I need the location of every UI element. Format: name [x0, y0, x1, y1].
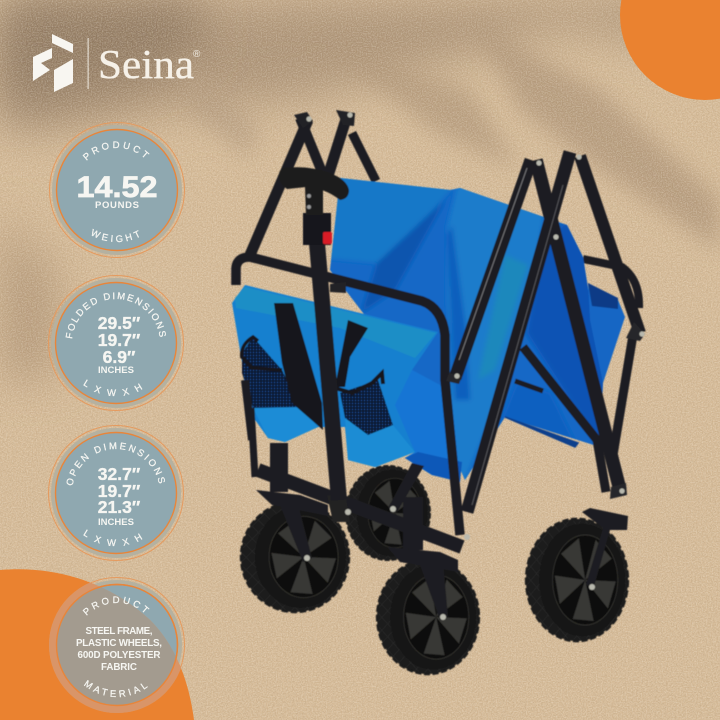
logo: Seina	[33, 34, 201, 92]
badge: open dimensions: 32.7″	[98, 464, 141, 484]
right pocket	[588, 283, 625, 383]
right dark panel	[525, 222, 604, 435]
badge: folded dimensions: INCHES	[98, 365, 134, 376]
badge: product material: FABRIC	[101, 662, 137, 673]
right pocket bottom	[345, 418, 415, 467]
badge: product material: MATERIAL	[84, 680, 148, 698]
left flap	[325, 170, 455, 263]
back frame tubes	[250, 110, 639, 455]
fabric body	[325, 170, 625, 485]
wordmark: Seina	[98, 41, 194, 87]
bottom frame and posts	[245, 380, 462, 550]
left pocket bottom	[253, 407, 318, 442]
badge: open dimensions: OPEN DIMENSIONS	[66, 442, 165, 486]
badge: product material: PRODUCT	[82, 596, 150, 616]
badge: product material: PLASTIC WHEELS,	[76, 638, 162, 649]
wheel forks	[256, 463, 628, 620]
handle shaft	[317, 243, 339, 500]
badge: product weight	[49, 122, 185, 258]
badge: product material	[49, 577, 185, 713]
material list: STEEL FRAME,	[86, 626, 153, 637]
badge: open dimensions: 21.3″	[98, 497, 141, 517]
front pocket	[232, 285, 462, 482]
decorative orange circle: top right	[620, 0, 720, 100]
handle	[279, 167, 349, 500]
badge: folded dimensions: 29.5″	[98, 313, 141, 333]
red button	[323, 232, 332, 244]
wheels	[241, 502, 349, 612]
right front A-frame tubes	[306, 112, 645, 512]
badge: product weight: PRODUCT	[82, 141, 150, 160]
badge: folded dimensions	[48, 275, 184, 411]
product photo: blue folding wagon	[232, 110, 645, 674]
badge: product weight: POUNDS	[95, 200, 139, 211]
icon: logo mark	[33, 34, 73, 92]
badge: open dimensions: INCHES	[98, 517, 134, 528]
back wheel	[346, 466, 430, 560]
straps	[242, 303, 383, 430]
badge: product material: 600D POLYESTER	[78, 650, 160, 661]
badge: open dimensions: 19.7″	[98, 481, 141, 501]
badge: open dimensions: LXWXH	[83, 529, 142, 546]
center panel	[440, 182, 545, 485]
mesh pockets	[242, 337, 300, 408]
value: 14.52: 14.52	[76, 171, 158, 204]
badge: folded dimensions: LXWXH	[83, 379, 142, 396]
badge: open dimensions	[48, 425, 184, 561]
badge: product weight: WEIGHT	[92, 228, 139, 242]
upper rail	[236, 257, 460, 535]
logo: Seina: ®	[193, 49, 201, 60]
badge: folded dimensions: FOLDED DIMENSIONS	[66, 292, 166, 338]
fold shadow	[362, 200, 445, 312]
badge: folded dimensions: 6.9″	[103, 347, 136, 367]
handle grip	[279, 167, 349, 200]
decorative orange shape: bottom left	[0, 569, 194, 720]
badge: folded dimensions: 19.7″	[98, 330, 141, 350]
